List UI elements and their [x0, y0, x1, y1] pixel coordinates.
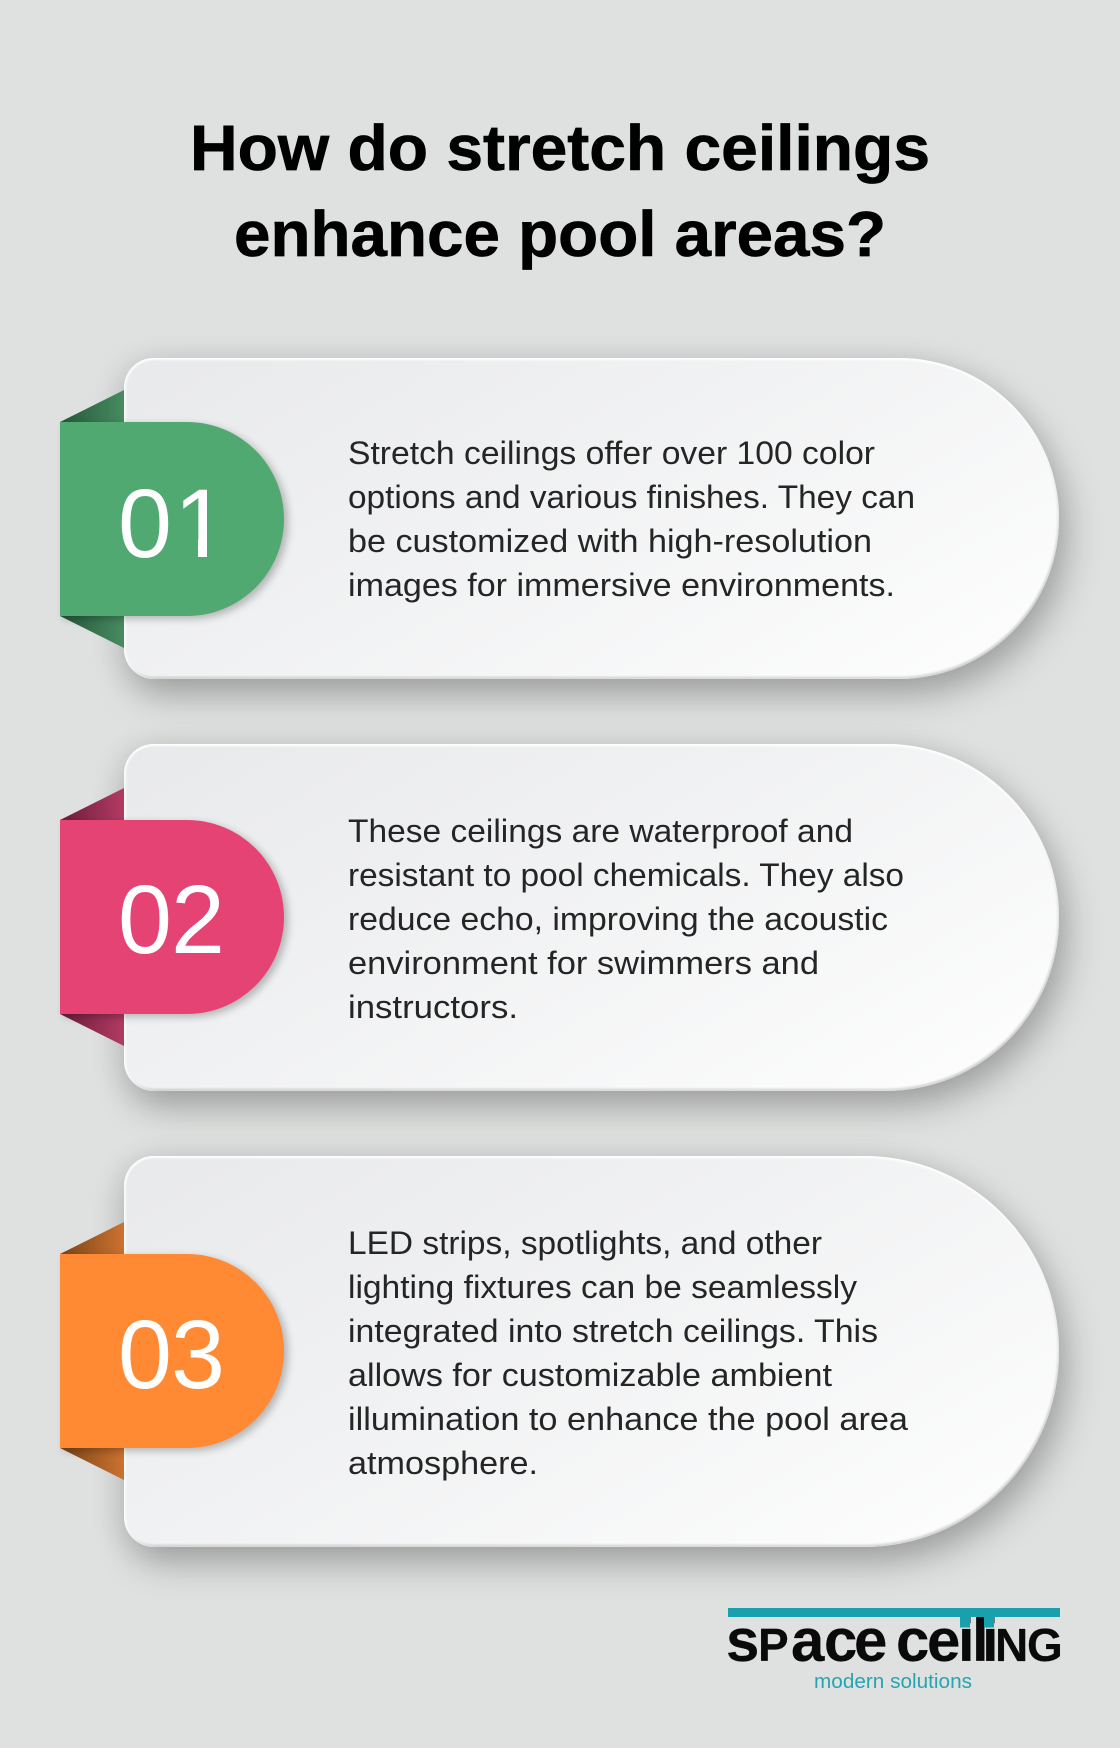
number badge 02: [60, 820, 284, 1014]
text block 01: [348, 435, 915, 603]
text block 01: Stretch ceilings offer over 100 color: [348, 435, 875, 471]
text block 01: images for immersive environments.: [348, 567, 895, 603]
text block 01: options and various finishes. They can: [348, 479, 915, 515]
card background 01: [124, 358, 1059, 679]
card background 03: [124, 1156, 1059, 1547]
number badge 01: 01: [118, 469, 228, 578]
text block 02: instructors.: [348, 989, 518, 1025]
text block 02: reduce echo, improving the acoustic: [348, 901, 888, 937]
logo wordmark: ceiliNG: [896, 1607, 1063, 1674]
title: How do stretch ceilings: [190, 112, 930, 184]
ribbon fold 02: [60, 788, 124, 1046]
logo: space ceiling: [726, 1607, 1063, 1693]
title: [190, 112, 930, 270]
panel: step 01 colour options: [60, 348, 1084, 714]
text block 03: illumination to enhance the pool area: [348, 1401, 909, 1437]
text block 03: allows for customizable ambient: [348, 1357, 832, 1393]
text block 03: lighting fixtures can be seamlessly: [348, 1269, 858, 1305]
ribbon fold 01: [60, 390, 124, 648]
text block 01: be customized with high-resolution: [348, 523, 872, 559]
card background 02: [124, 744, 1059, 1091]
logo wordmark: [726, 1607, 1063, 1674]
number badge 03: 03: [118, 1300, 225, 1409]
panel: step 03 integrated lighting: [60, 1146, 1085, 1582]
text block 03: integrated into stretch ceilings. This: [348, 1313, 878, 1349]
text block 03: LED strips, spotlights, and other: [348, 1225, 822, 1261]
title: enhance pool areas?: [234, 198, 886, 270]
logo teal bar: [728, 1608, 1060, 1628]
logo tagline: modern solutions: [814, 1671, 972, 1693]
text block 02: environment for swimmers and: [348, 945, 819, 981]
text block 02: resistant to pool chemicals. They also: [348, 857, 904, 893]
text block 02: [348, 813, 904, 1025]
number badge 03: [60, 1254, 284, 1448]
panel: step 02 waterproof and acoustic: [60, 734, 1084, 1126]
number badge 02: 02: [118, 865, 225, 974]
text block 03: [348, 1225, 909, 1481]
text block 03: atmosphere.: [348, 1445, 538, 1481]
number badge 01: [60, 422, 284, 616]
text block 02: These ceilings are waterproof and: [348, 813, 853, 849]
ribbon fold 03: [60, 1222, 124, 1480]
logo wordmark: sPace: [726, 1607, 887, 1674]
